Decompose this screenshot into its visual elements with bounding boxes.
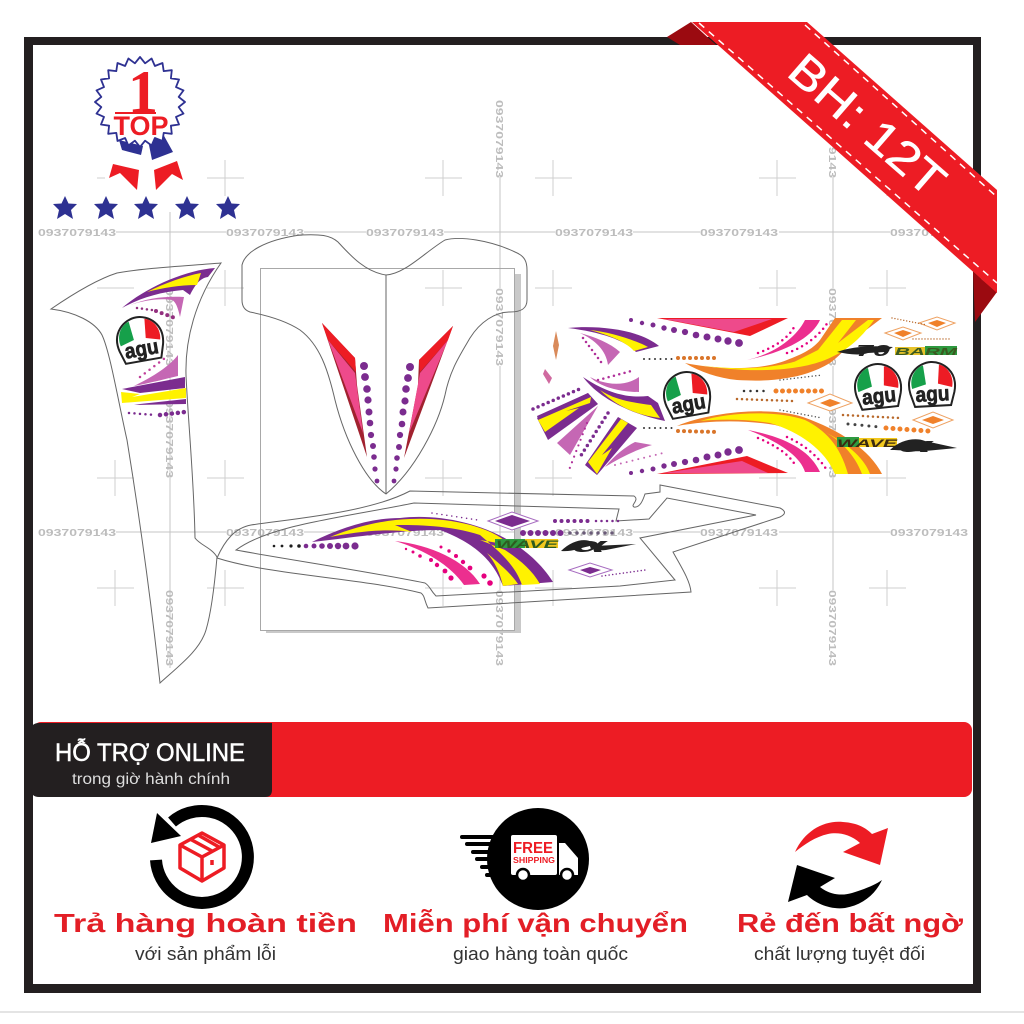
right agu logo two: [908, 361, 956, 407]
upper small swoosh: [568, 327, 659, 352]
support banner: [31, 722, 972, 797]
fork dots: [137, 308, 152, 310]
left striped block: [537, 393, 598, 440]
bottom purple dots: [629, 446, 743, 475]
fork upper swoosh: [122, 268, 215, 308]
registration marks and watermarks: 0937079143: [700, 228, 779, 239]
agu logo: [113, 313, 166, 365]
panel: fork decal: [51, 263, 221, 683]
right fin: [404, 326, 453, 458]
wave wordmark bottom: α: [898, 435, 936, 457]
ribbon tails red: [109, 161, 183, 190]
panel: side body decal: [217, 485, 784, 608]
heading: Trả hàng hoàn tiền: [54, 908, 357, 938]
right dot column: [392, 363, 414, 483]
right agu logo one: agu: [861, 383, 897, 410]
registration marks and watermarks: 0937079143: [366, 528, 445, 539]
registration marks and watermarks: 0937079143: [826, 100, 837, 179]
top triangle: [657, 318, 788, 336]
dot row left: [273, 544, 301, 548]
template sheet rectangle: [260, 268, 521, 633]
icon: return arrow ring: [151, 811, 248, 903]
registration marks and watermarks: 0937079143: [38, 528, 117, 539]
centre agu logo: [660, 368, 713, 420]
left dot column: [360, 362, 379, 483]
stitching: [699, 23, 997, 283]
wave alpha logo: WAVE: [496, 539, 559, 551]
wave wordmark bottom: WAVE: [837, 438, 898, 450]
icon: swap arrows: [788, 822, 888, 908]
top pink swoosh: [747, 320, 820, 360]
top flame swoosh: [685, 318, 882, 381]
purple dot rows: [555, 519, 590, 523]
bottom triangle: [657, 456, 788, 474]
icon: truck disc: [462, 808, 589, 910]
tiny stickers: [553, 331, 559, 360]
shield outline: [242, 235, 527, 494]
red band: [33, 722, 972, 797]
registration marks and watermarks: 0937079143: [163, 400, 174, 479]
bottom flame swoosh: [677, 411, 882, 474]
registration marks and watermarks: 0937079143: [163, 590, 174, 667]
large purple diamond: [488, 512, 538, 530]
subtext: chất lượng tuyệt đối: [754, 944, 925, 964]
outer outline: [217, 485, 784, 608]
top purple dots: [629, 318, 743, 347]
agu logo: agu: [123, 335, 160, 364]
pink dot arcs: [405, 546, 493, 586]
wave alpha logo: [495, 535, 636, 557]
support hours: trong giờ hành chính: [72, 771, 230, 788]
subtext: với sản phẩm lỗi: [135, 943, 276, 964]
orange diamonds: [808, 394, 852, 411]
left fin: [322, 323, 367, 457]
numeral one: 1: [128, 59, 158, 125]
top label: TOP: [114, 111, 168, 141]
panel: centre shield decal: [242, 235, 527, 494]
inner outline: [236, 498, 756, 596]
ribbon folds: [667, 22, 997, 322]
purple swoosh: [312, 517, 553, 586]
x brand wordmark top: 70: [856, 343, 890, 360]
subtext: giao hàng toàn quốc: [453, 944, 628, 964]
registration marks and watermarks: [38, 100, 969, 668]
feature: return: [54, 811, 357, 964]
registration marks and watermarks: 0937079143: [493, 100, 504, 179]
pink swoosh: [395, 541, 480, 585]
fork lower swoosh: [134, 355, 178, 386]
five stars: [53, 196, 240, 219]
bottom pink swoosh: [748, 430, 820, 472]
badge: top 1 rosette: [95, 57, 185, 190]
ribbon: warranty: [667, 22, 997, 322]
registration marks and watermarks: 0937079143: [700, 528, 779, 539]
registration marks and watermarks: 0937079143: [826, 590, 837, 667]
wave alpha logo: α: [572, 535, 610, 557]
orange dot rows: [644, 358, 672, 360]
right agu logo two: agu: [915, 382, 950, 407]
heading: Rẻ đến bất ngờ: [737, 908, 964, 938]
registration marks and watermarks: 0937079143: [38, 228, 117, 239]
feature: price: [737, 822, 964, 964]
warranty text: BH: 12T: [779, 43, 956, 207]
centre agu logo: agu: [670, 390, 707, 419]
middle swoosh: [590, 377, 639, 392]
x brand wordmark top: BARM: [895, 347, 958, 358]
lower striped block: [585, 417, 637, 475]
ribbon tails blue: [119, 134, 173, 160]
registration marks and watermarks: 0937079143: [163, 288, 174, 367]
registration marks and watermarks: 0937079143: [493, 288, 504, 367]
icon: red box: [180, 833, 224, 881]
registration marks and watermarks: 0937079143: [826, 400, 837, 479]
rosette: [95, 57, 185, 147]
x brand wordmark top: [837, 343, 958, 360]
registration marks and watermarks: 0937079143: [226, 528, 305, 539]
support heading: HỖ TRỢ ONLINE: [55, 737, 245, 767]
panel: sheet of mixed stickers: [533, 317, 958, 475]
registration marks and watermarks: 0937079143: [555, 228, 634, 239]
heading: Miễn phí vận chuyển: [383, 908, 688, 938]
fork outline: [51, 263, 221, 683]
registration marks and watermarks: 0937079143: [366, 228, 445, 239]
registration marks and watermarks: 0937079143: [226, 228, 305, 239]
registration marks and watermarks: 0937079143: [890, 228, 969, 239]
icon: truck disc: FREE: [513, 840, 553, 857]
right agu logo one: [853, 362, 903, 410]
yellow swoosh: [330, 519, 540, 585]
wave wordmark bottom: [837, 435, 957, 457]
feature: free shipping: [383, 808, 688, 964]
registration marks and watermarks: 0937079143: [826, 288, 837, 367]
registration marks and watermarks: 0937079143: [890, 528, 969, 539]
registration marks and watermarks: 0937079143: [493, 590, 504, 667]
ribbon band: [692, 22, 997, 293]
black tab: [31, 723, 272, 797]
icon: truck disc: SHIPPING: [513, 856, 555, 865]
small purple diamond: [569, 563, 612, 577]
registration marks and watermarks: 0937079143: [555, 528, 634, 539]
